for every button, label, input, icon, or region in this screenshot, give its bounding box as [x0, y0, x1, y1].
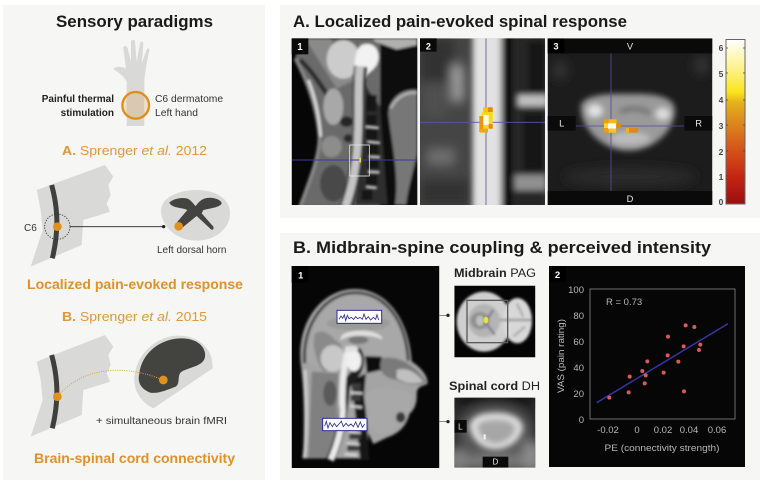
plot axes — [590, 289, 735, 419]
x axis label: PE (connectivity strength) — [604, 443, 720, 454]
image labels: 3 V L R D — [553, 41, 702, 204]
image 1: sagittal head MRI with signal traces — [292, 266, 543, 473]
image 2: zoomed cord with activation — [420, 33, 548, 210]
colorbar: 3 — [719, 121, 724, 131]
heading: study A citation: A. Sprenger et al. 2012 — [62, 143, 207, 158]
axis tick labels: 20 — [573, 389, 584, 400]
axis tick labels: 0 — [579, 415, 584, 426]
axis tick labels: 0.04 — [680, 425, 698, 436]
colorbar — [719, 40, 745, 207]
illustration: neck and brain connectivity — [31, 335, 213, 437]
slice labels: L D: L — [458, 422, 463, 431]
arrow: spinal link — [439, 420, 450, 423]
panel: sensory paradigms — [3, 5, 265, 480]
label: left dorsal horn: Left dorsal horn — [157, 245, 226, 256]
axis tick labels: 0 — [634, 425, 640, 436]
label: spinal cord DH: Spinal cord DH — [449, 381, 540, 393]
image: spinal cord dorsal horn slice — [454, 398, 536, 468]
data points — [607, 323, 702, 400]
y axis label: VAS (pain rating) — [556, 319, 567, 393]
trace: midbrain signal — [337, 310, 382, 323]
heading: localized pain-evoked response: Localized pain-evoked response — [27, 277, 243, 292]
heading: study B citation: B. Sprenger et al. 2015 — [62, 309, 207, 324]
scatter plot: VAS vs PE — [549, 266, 745, 467]
badge: 2 — [549, 266, 566, 282]
badge: 1: 1 — [298, 270, 303, 280]
slice labels: L D: D — [492, 458, 498, 467]
axis tick labels: 40 — [573, 363, 584, 374]
regression line — [597, 324, 728, 403]
image labels: 3 V L R D: V — [627, 41, 634, 51]
badge: 1 — [292, 266, 308, 283]
heading: panel A title: A. Localized pain-evoked spinal response — [293, 12, 627, 31]
axis tick labels: 100 — [568, 285, 584, 296]
label: C6 dermatome left hand: Left hand — [155, 108, 198, 119]
badge: 2 — [420, 38, 437, 52]
heading: brain-spinal cord connectivity: Brain-spinal cord connectivity — [34, 451, 236, 466]
image 3: axial cord with activation — [548, 38, 712, 205]
axis tick labels: 60 — [573, 337, 584, 348]
badge: 1: 1 — [297, 42, 303, 53]
label: C6 dermatome left hand: C6 dermatome — [155, 94, 223, 105]
correlation value: R = 0.73 — [606, 297, 642, 308]
heading: panel B title: B. Midbrain-spine coupling & perceived intensity — [293, 238, 712, 257]
axis tick labels: 0.02 — [654, 425, 672, 436]
label: C6: C6 — [24, 223, 37, 234]
badge: 1 — [292, 38, 308, 54]
colorbar: 6 — [719, 43, 724, 53]
axis tick labels: 0.06 — [708, 425, 726, 436]
badge: 2: 2 — [555, 270, 560, 281]
image labels: 3 V L R D: 3 — [553, 41, 559, 51]
trace: spinal signal — [323, 418, 367, 431]
image labels: 3 V L R D: R — [695, 119, 702, 129]
illustration: neck profile with C6 marker — [31, 165, 165, 267]
axis tick labels: 80 — [573, 311, 584, 322]
label: painful thermal stimulation: stimulation — [61, 108, 114, 119]
label: simultaneous brain fMRI: + simultaneous brain fMRI — [96, 416, 227, 427]
label: painful thermal stimulation: Painful thermal — [42, 94, 114, 105]
image labels: 3 V L R D: D — [627, 194, 634, 204]
panel: localized pain-evoked spinal response — [280, 5, 760, 218]
axis tick labels: -0.02 — [597, 425, 619, 436]
axis tick labels — [568, 285, 726, 436]
image 1: sagittal cervical MRI — [292, 38, 417, 207]
colorbar: 2 — [719, 147, 724, 157]
illustration: spinal cord cross-section — [161, 190, 230, 241]
colorbar: 0 — [719, 197, 724, 207]
panel: midbrain-spine coupling and perceived intensity — [280, 233, 760, 480]
icon: hand with stimulation circle — [113, 40, 149, 126]
image: midbrain PAG axial slice — [454, 286, 535, 357]
label: midbrain PAG: Midbrain PAG — [454, 268, 536, 280]
colorbar: 5 — [719, 69, 724, 79]
slice labels: L D — [458, 422, 498, 467]
colorbar: 4 — [719, 95, 724, 105]
arrow: midbrain link — [439, 314, 450, 317]
heading: sensory paradigms: Sensory paradigms — [56, 12, 213, 31]
badge: 2: 2 — [426, 41, 431, 51]
colorbar: 1 — [719, 172, 724, 182]
image labels: 3 V L R D: L — [559, 119, 564, 129]
